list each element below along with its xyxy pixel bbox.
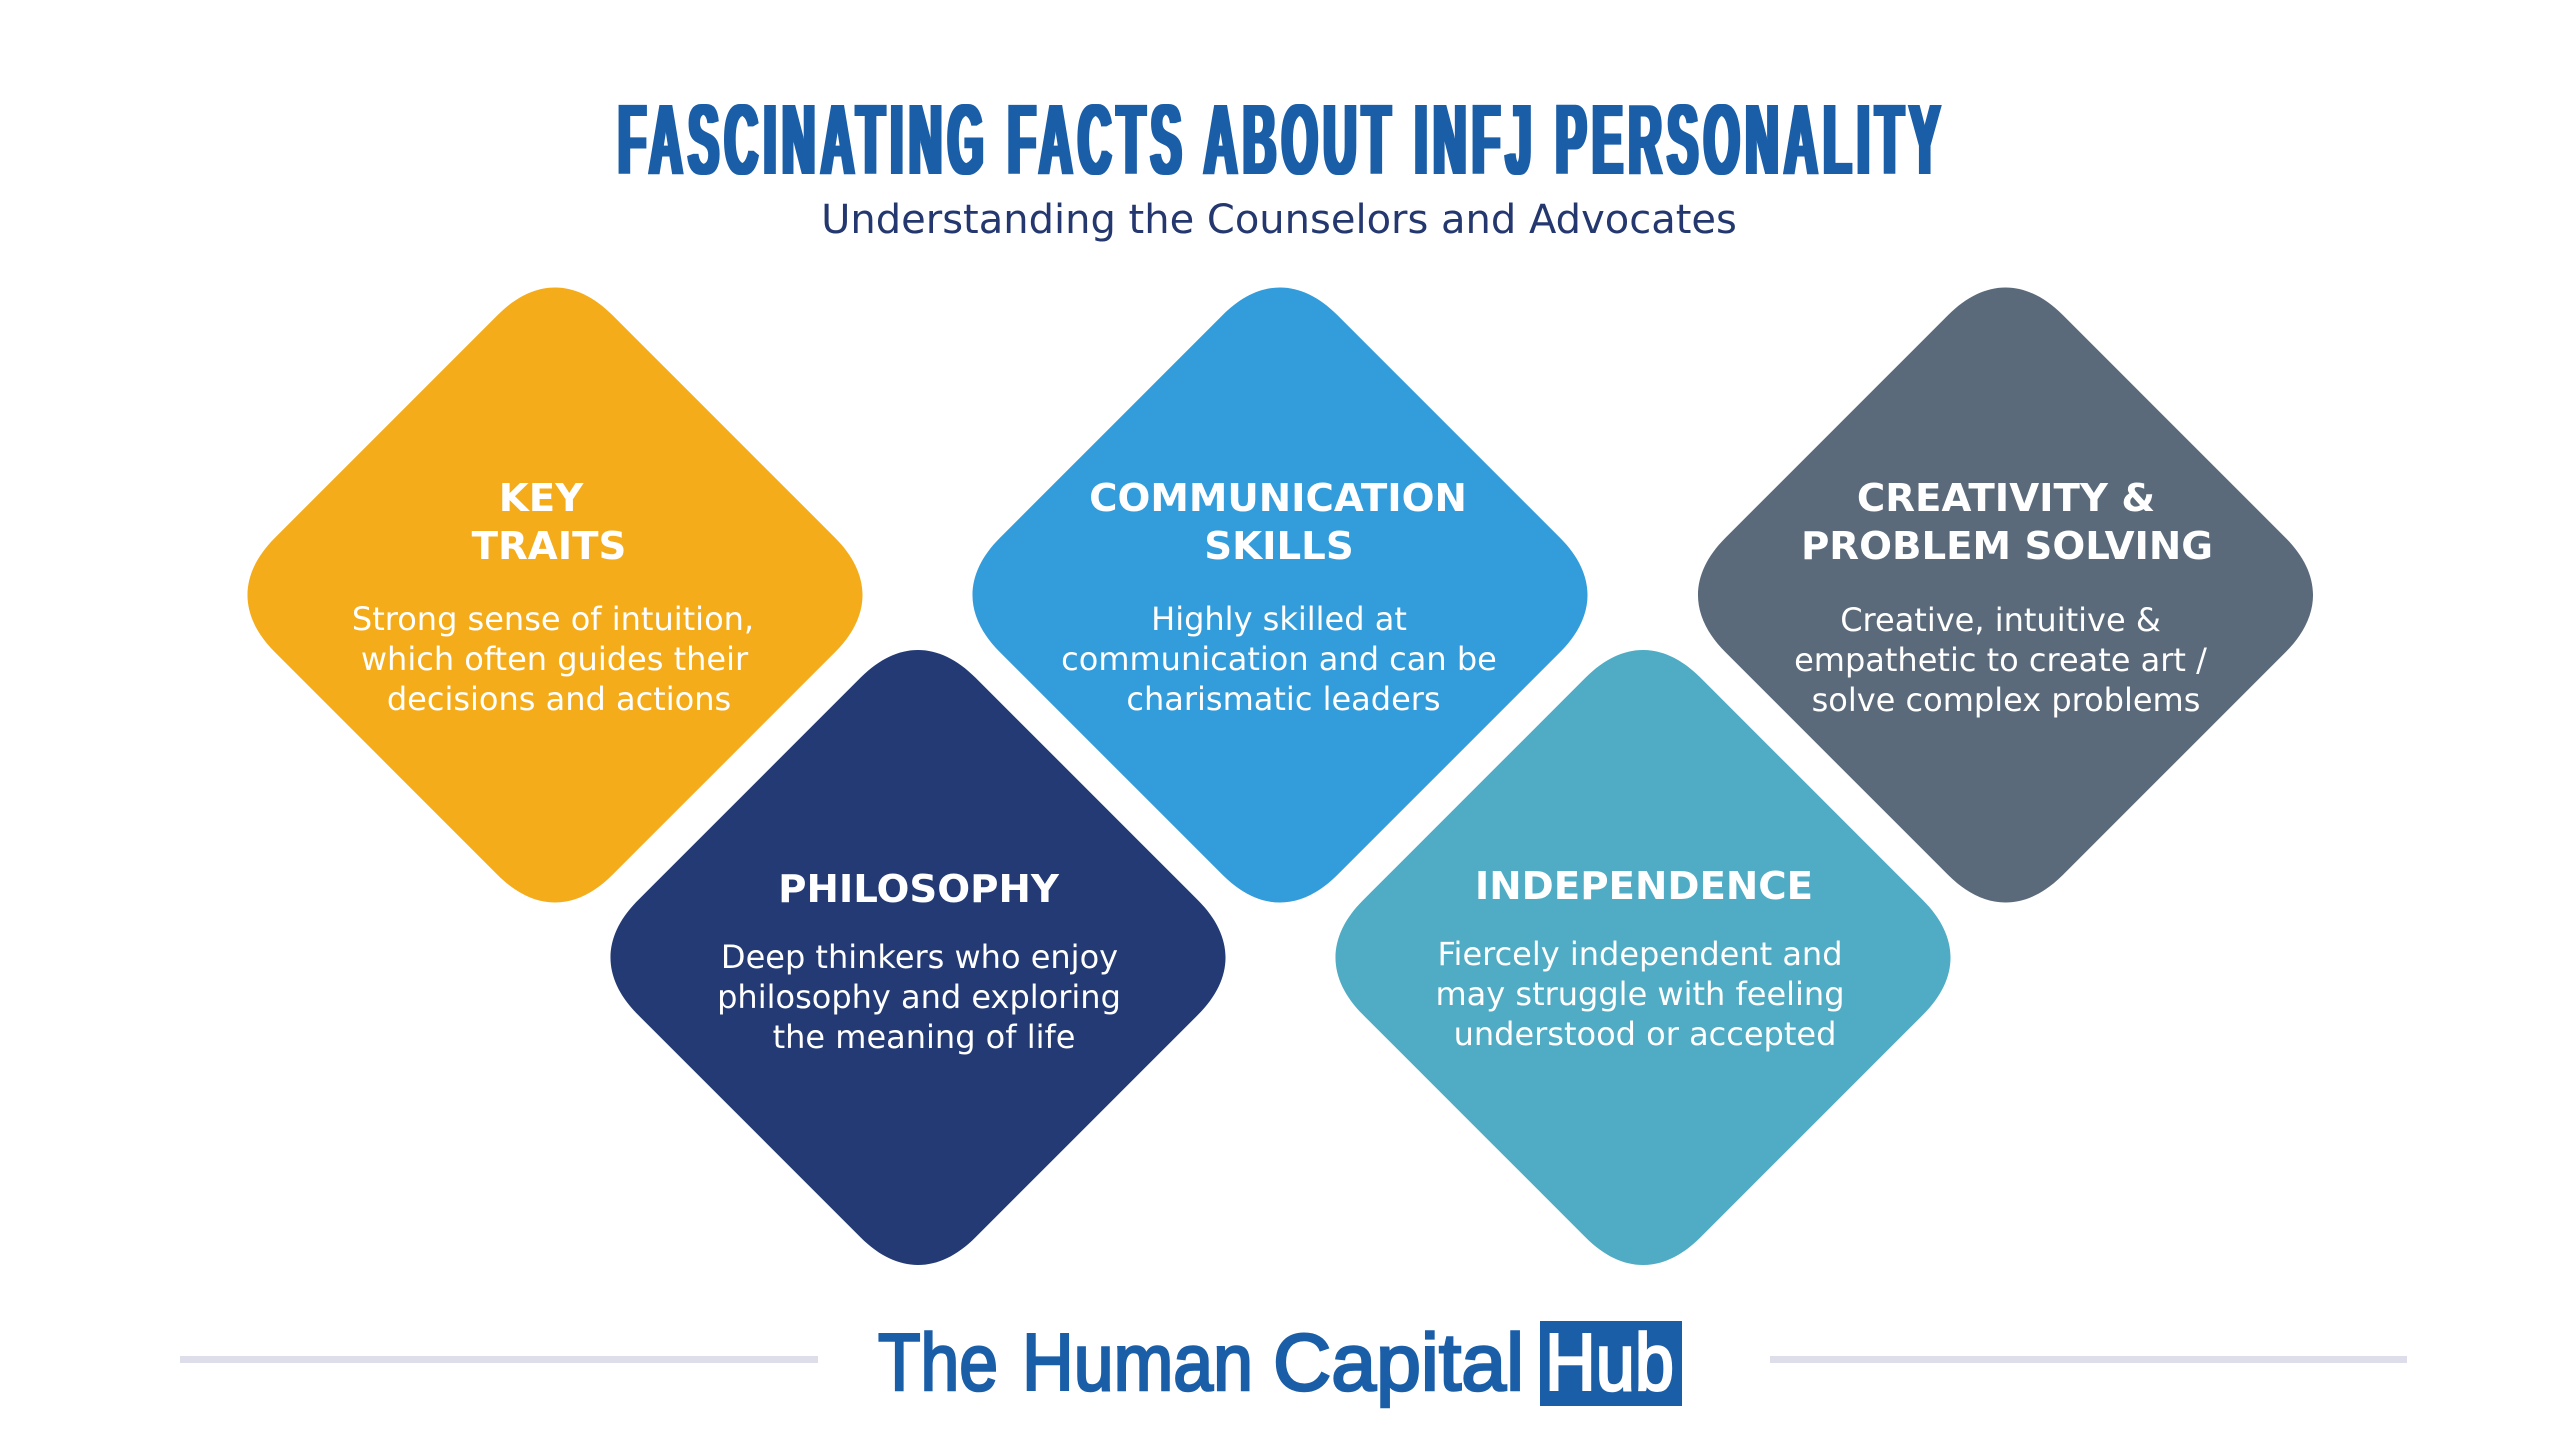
panel: key traits: KEY [499,476,584,521]
panel: creativity and problem solving: PROBLEM SOLVING [1801,524,2213,569]
logo: Capital [1273,1318,1524,1408]
panel: independence: Fiercely independent and [1437,935,1843,973]
panel: philosophy: the meaning of life [773,1018,1075,1056]
panel: philosophy [610,650,1226,1265]
panel: creativity and problem solving: solve complex problems [1812,681,2200,719]
logo: Human [1022,1318,1253,1408]
panel: communication skills: Highly skilled at [1151,600,1407,638]
panel: independence: INDEPENDENCE [1475,864,1813,909]
panel: independence: understood or accepted [1454,1015,1836,1053]
panel: communication skills: communication and can be [1061,640,1497,678]
logo: The [878,1318,998,1408]
panel: communication skills [972,287,1588,903]
logo: Hub [1545,1318,1674,1408]
footer rule right [1770,1356,2407,1363]
footer rule left [180,1356,818,1363]
panel: communication skills: charismatic leaders [1126,680,1441,718]
panel: creativity and problem solving: CREATIVITY & [1857,476,2155,521]
subtitle: Understanding the Counselors and Advocates [821,197,1737,243]
panel: philosophy: PHILOSOPHY [778,867,1060,912]
panel: philosophy: Deep thinkers who enjoy [721,938,1118,976]
panel: independence [1335,650,1951,1265]
panel: key traits [247,287,863,903]
panel: key traits: decisions and actions [387,680,731,718]
panel: communication skills: COMMUNICATION [1089,476,1467,521]
panel: philosophy: philosophy and exploring [717,978,1121,1016]
panel: key traits: Strong sense of intuition, [352,600,754,638]
panel: creativity and problem solving [1698,287,2313,903]
logo [878,1318,1682,1408]
panel: key traits: which often guides their [361,640,749,678]
panel: creativity and problem solving: Creative, intuitive & [1840,601,2161,639]
panel: independence: may struggle with feeling [1436,975,1844,1013]
panel: communication skills: SKILLS [1204,524,1354,569]
panel: key traits: TRAITS [472,524,626,569]
panel: creativity and problem solving: empathetic to create art / [1794,641,2207,679]
title: FASCINATING FACTS ABOUT INFJ PERSONALITY [618,85,1940,196]
